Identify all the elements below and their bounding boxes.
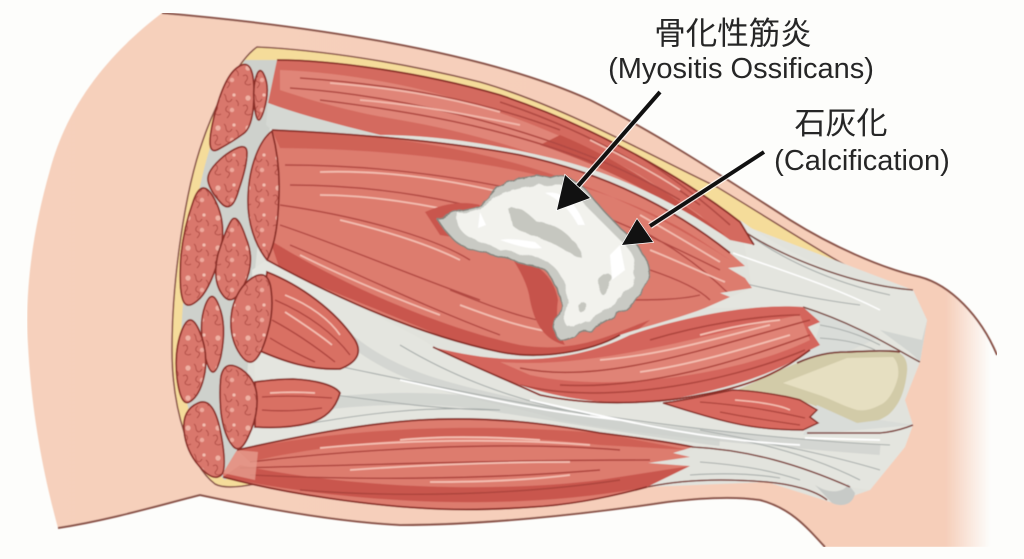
label: calcification: 石灰化 [794,106,888,141]
muscle: long bottom belly [220,415,700,515]
tendon: underlay filling the gaps between muscles [240,62,927,506]
calcified mass [438,176,649,340]
muscle: upper band [268,60,754,246]
arrow: to ossified mass [557,92,660,210]
label: myositis ossificans: 骨化性筋炎 [654,15,812,51]
muscle: lower central belly [432,306,820,404]
label: myositis ossificans: (Myositis Ossificans) [608,53,874,85]
bone: femur end [737,351,907,423]
label: myositis ossificans [608,15,874,85]
fascia: yellow fat layer [172,47,883,487]
connective tissue between sections [181,60,285,480]
label: calcification [774,106,950,177]
arrow: to calcification [622,152,764,245]
muscle: large central belly [266,128,752,357]
muscle: small lower belly [663,390,818,430]
muscle: short upper-left belly [258,272,358,369]
label: calcification: (Calcification) [774,145,950,177]
tendon: central white fascia sheet [237,260,913,490]
tendon: upper right [705,220,927,363]
muscle: short lower-left belly [255,379,340,428]
cross-sections of muscle bundles [176,64,279,477]
tendon: lower right [647,405,913,505]
muscle: upper band outline [277,60,754,245]
tendon: wedge below upper band [266,103,380,135]
